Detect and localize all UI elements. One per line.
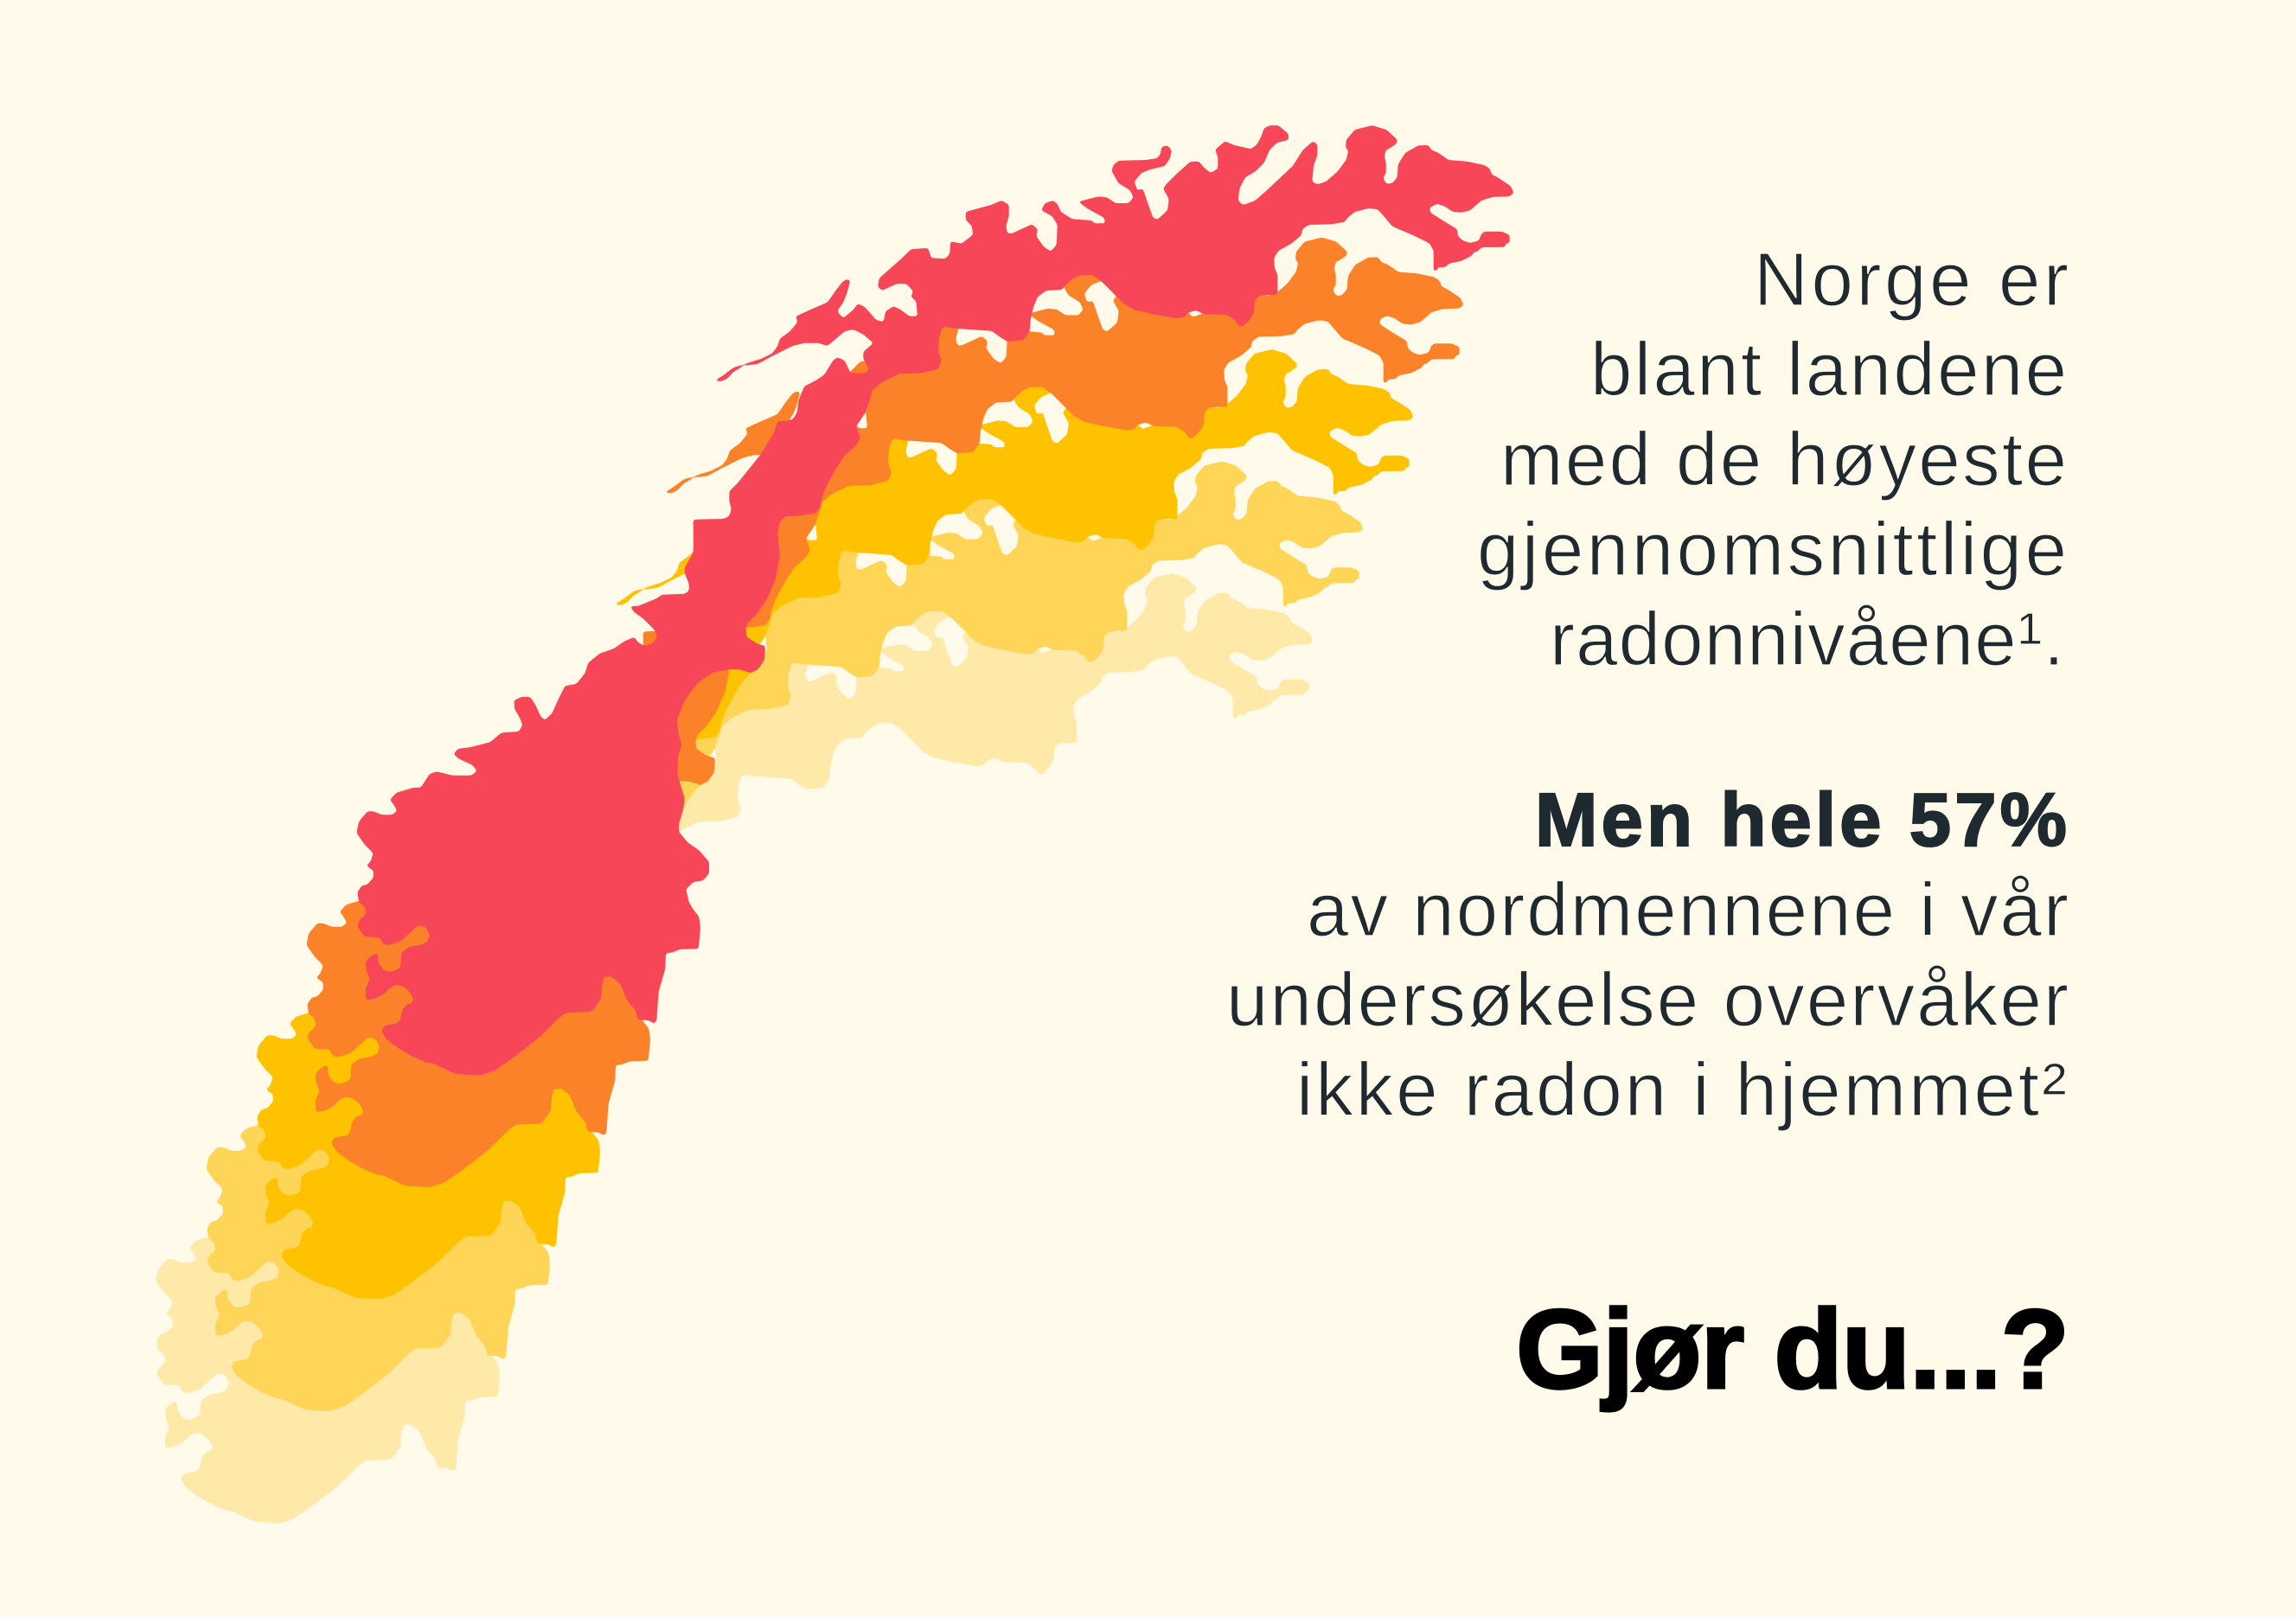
map layer: orange — [306, 237, 1464, 1187]
call to action question: Gjør du...? — [1516, 1286, 2069, 1412]
text block: intro about radon levels: gjennomsnittlige — [1477, 508, 2067, 591]
map of Norway: layered radon levels — [156, 125, 1514, 1523]
statistic description: undersøkelse overvåker — [1226, 958, 2069, 1042]
statistic description: av nordmennene i vår — [1307, 868, 2069, 952]
map layer: light yellow — [206, 462, 1364, 1411]
statistic description — [1226, 868, 2069, 1132]
map layer: yellow — [256, 349, 1414, 1299]
text block: 57 percent statistic — [1226, 778, 2069, 1132]
text block: intro about radon levels: blant landene — [1590, 328, 2067, 412]
text block: intro about radon levels: Norge er — [1754, 238, 2069, 322]
text block: intro about radon levels: radonnivåene¹. — [1550, 598, 2064, 681]
map layer: red — [356, 125, 1514, 1075]
map layer: palest yellow — [156, 573, 1314, 1523]
text block: intro about radon levels — [1477, 238, 2069, 681]
text block: intro about radon levels: med de høyeste — [1500, 418, 2067, 502]
bold statistic heading: Men hele 57% — [1535, 778, 2067, 862]
statistic description: ikke radon i hjemmet² — [1296, 1048, 2067, 1132]
